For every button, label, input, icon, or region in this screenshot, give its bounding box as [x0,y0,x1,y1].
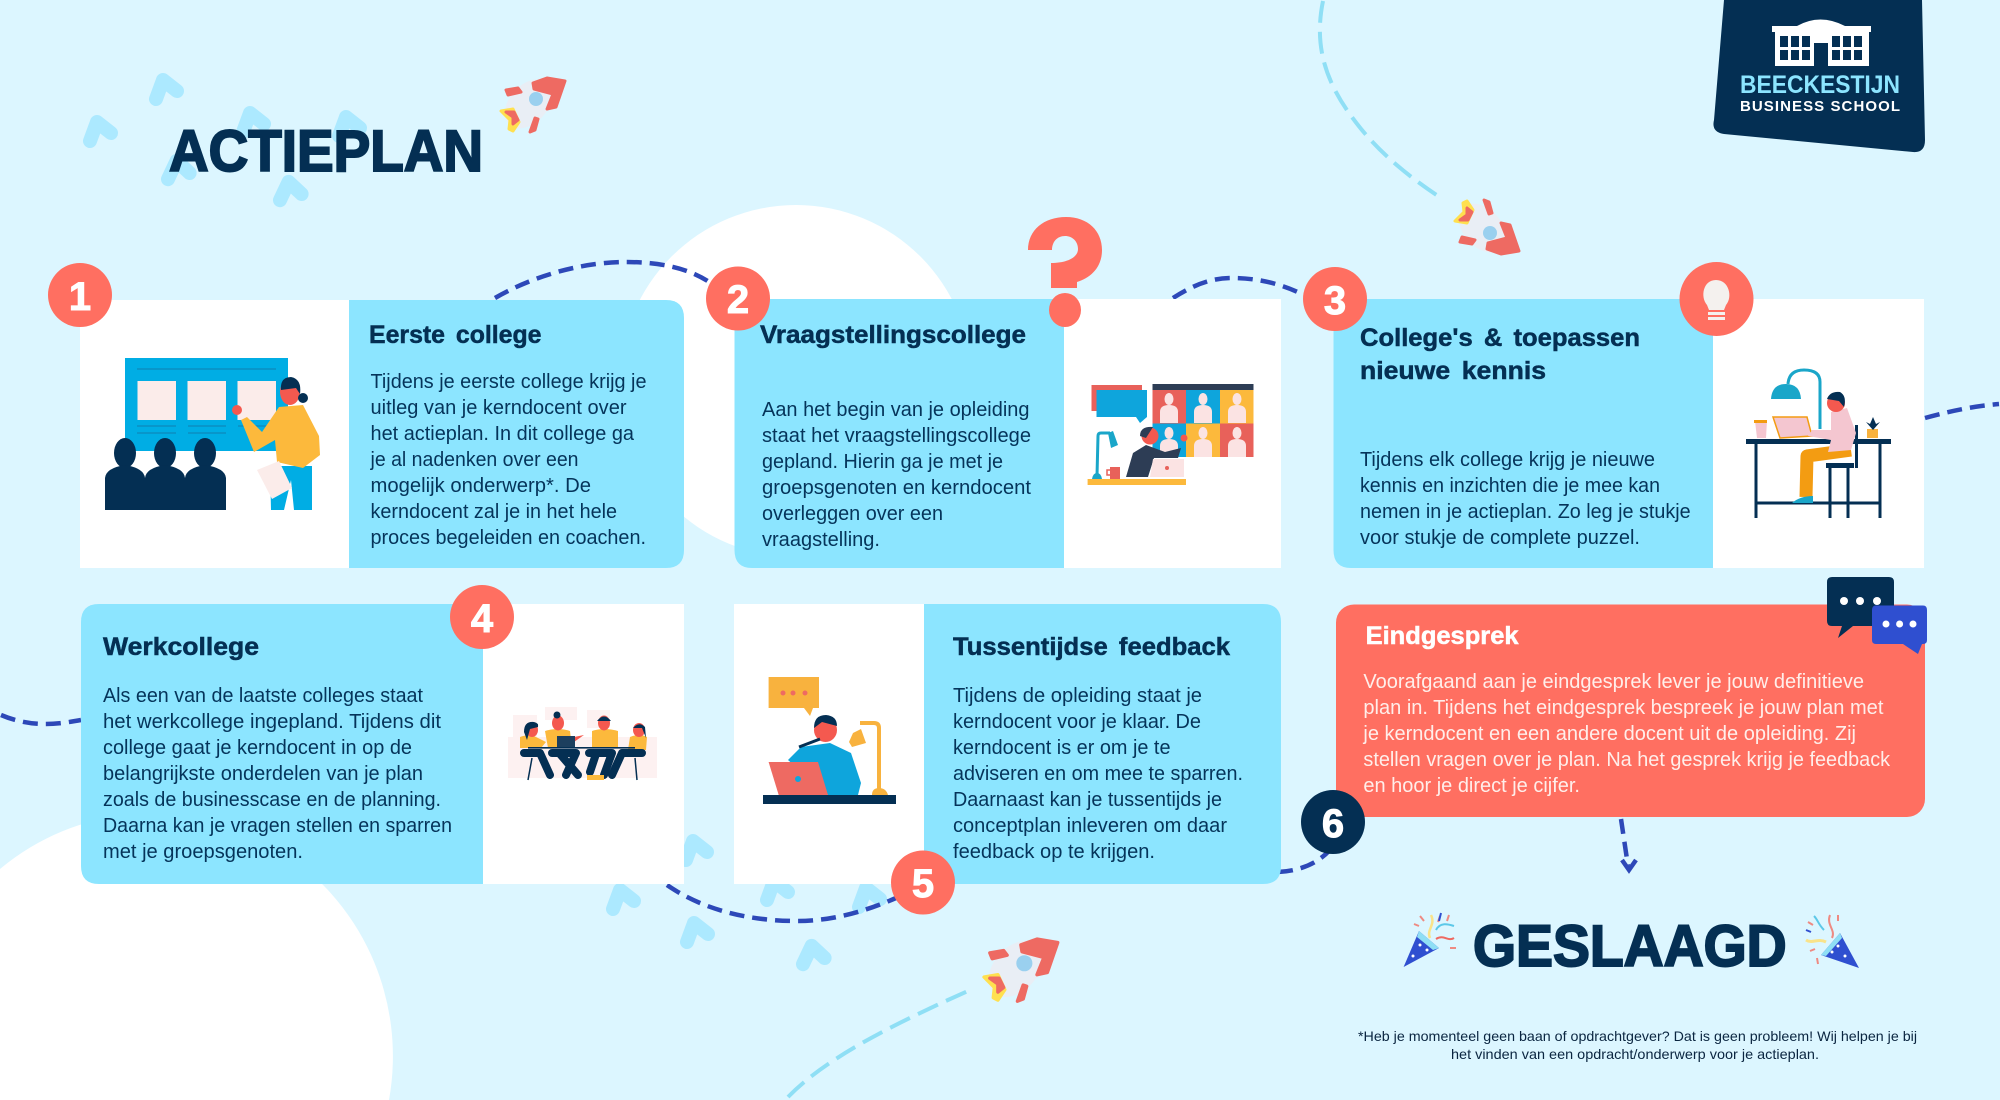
body text: Tijdens de opleiding staat je [953,685,1202,707]
footnote: *Heb je momenteel geen baan of opdrachtgever? Dat is geen probleem! Wij helpen je bij [1358,1028,1917,1044]
icon: party popper right [1806,915,1859,968]
logo: Beeckestijn Business School [1713,0,1925,152]
body text: voor stukje de complete puzzel. [1360,527,1640,549]
body text: kerndocent zal je in het hele [370,501,617,523]
footnote [1358,1028,1917,1062]
icon: question mark [1028,217,1102,327]
body text [370,371,646,549]
illustration: desk worker [1746,370,1891,518]
number badge 5: 5 [912,862,934,906]
text: geslaagd: GESLAAGD [1473,914,1787,979]
body text: kerndocent is er om je te [953,737,1170,759]
panel: step 3 college's en toepassen [1334,299,1924,568]
title: ACTIEPLAN [169,119,483,184]
number badge 3 [1303,267,1367,331]
body text: groepsgenoten en kerndocent [762,477,1031,499]
body text: je al nadenken over een [370,449,578,471]
body text [103,685,452,863]
body text: kennis en inzichten die je mee kan [1360,475,1660,497]
number badge 3: 3 [1324,279,1346,323]
body text: plan in. Tijdens het eindgesprek bespreek je jouw plan met [1363,697,1884,719]
panel: step 5 tussentijdse feedback [734,604,1281,884]
body text: stellen vragen over je plan. Na het gesprek krijg je feedback [1363,749,1891,771]
body text: mogelijk onderwerp*. De [370,475,591,497]
logo: Beeckestijn Business School: BUSINESS SCHOOL [1740,98,1900,115]
number badge 1 [48,263,112,327]
heading: Eerste college [369,321,542,349]
body text: feedback op te krijgen. [953,841,1155,863]
body text: Aan het begin van je opleiding [762,399,1030,421]
number badge 4 [450,585,514,649]
icon: rocket top [496,70,565,137]
decorative chevrons top [90,80,360,202]
body text: overleggen over een [762,503,943,525]
body text: Tijdens je eerste college krijg je [370,371,646,393]
number badge 5 [891,850,955,914]
dashed route lines [1,262,1999,921]
body text: Daarna kan je vragen stellen en sparren [103,815,452,837]
footnote: het vinden van een opdracht/onderwerp voor je actieplan. [1451,1046,1819,1062]
body text: Als een van de laatste colleges staat [103,685,423,707]
body text [1360,449,1691,549]
body text: proces begeleiden en coachen. [370,527,646,549]
number badge 6: 6 [1322,802,1344,846]
illustration: video call [1088,384,1254,485]
body text [1362,671,1891,797]
body text: conceptplan inleveren om daar [953,815,1227,837]
heading: College's & toepassen [1360,324,1640,352]
heading: Tussentijdse feedback [953,633,1230,661]
heading [1360,324,1640,385]
body text: nemen in je actieplan. Zo leg je stukje [1360,501,1691,523]
decorative chevrons bottom [613,841,880,966]
body text: het actieplan. In dit college ga [370,423,635,445]
body text: je kerndocent en een andere docent uit de opleiding. Zij [1362,723,1856,745]
panel: step 2 vraagstellingscollege [734,299,1281,568]
body text: met je groepsgenoten. [103,841,303,863]
panel: step 6 eindgesprek [1336,604,1925,817]
body text [762,399,1031,551]
body text: gepland. Hierin ga je met je [762,451,1003,473]
number badge 1: 1 [69,275,91,319]
body text: vraagstelling. [762,529,880,551]
icon: light bulb badge [1680,262,1754,336]
heading: Werkcollege [103,633,259,661]
illustration: person with laptop [763,677,896,804]
icon: school building [1772,20,1871,66]
icon: rocket bottom [978,930,1058,1007]
icon: rocket right [1450,195,1519,262]
body text: en hoor je direct je cijfer. [1363,775,1580,797]
dashed arrow to geslaagd [1621,819,1636,870]
body text: Voorafgaand aan je eindgesprek lever je jouw definitieve [1363,671,1864,693]
body text: het werkcollege ingepland. Tijdens dit [103,711,441,733]
body text: college gaat je kerndocent in op de [103,737,412,759]
number badge 2: 2 [727,278,749,322]
panel: step 4 werkcollege [81,604,684,884]
body text: staat het vraagstellingscollege [762,425,1031,447]
body text: uitleg van je kerndocent over [370,397,627,419]
heading: nieuwe kennis [1360,357,1546,385]
heading: Vraagstellingscollege [760,321,1026,349]
logo: Beeckestijn Business School: BEECKESTIJN [1740,71,1900,99]
body text [953,685,1243,863]
icon: party popper left [1404,913,1456,967]
body text: adviseren en om mee te sparren. [953,763,1243,785]
panel: step 1 eerste college [80,300,684,568]
body text: kerndocent voor je klaar. De [953,711,1201,733]
number badge 2 [706,266,770,330]
body text: Tijdens elk college krijg je nieuwe [1360,449,1655,471]
number badge 6 [1301,790,1365,854]
body text: Daarnaast kan je tussentijds je [953,789,1222,811]
body text: zoals de businesscase en de planning. [103,789,441,811]
heading: Eindgesprek [1366,622,1519,650]
illustration: presentation [105,358,320,510]
illustration: group at table [508,707,657,780]
light dashed rocket trails [788,1,1438,1097]
body text: belangrijkste onderdelen van je plan [103,763,423,785]
number badge 4: 4 [471,597,494,641]
icon: chat bubbles [1827,577,1927,654]
